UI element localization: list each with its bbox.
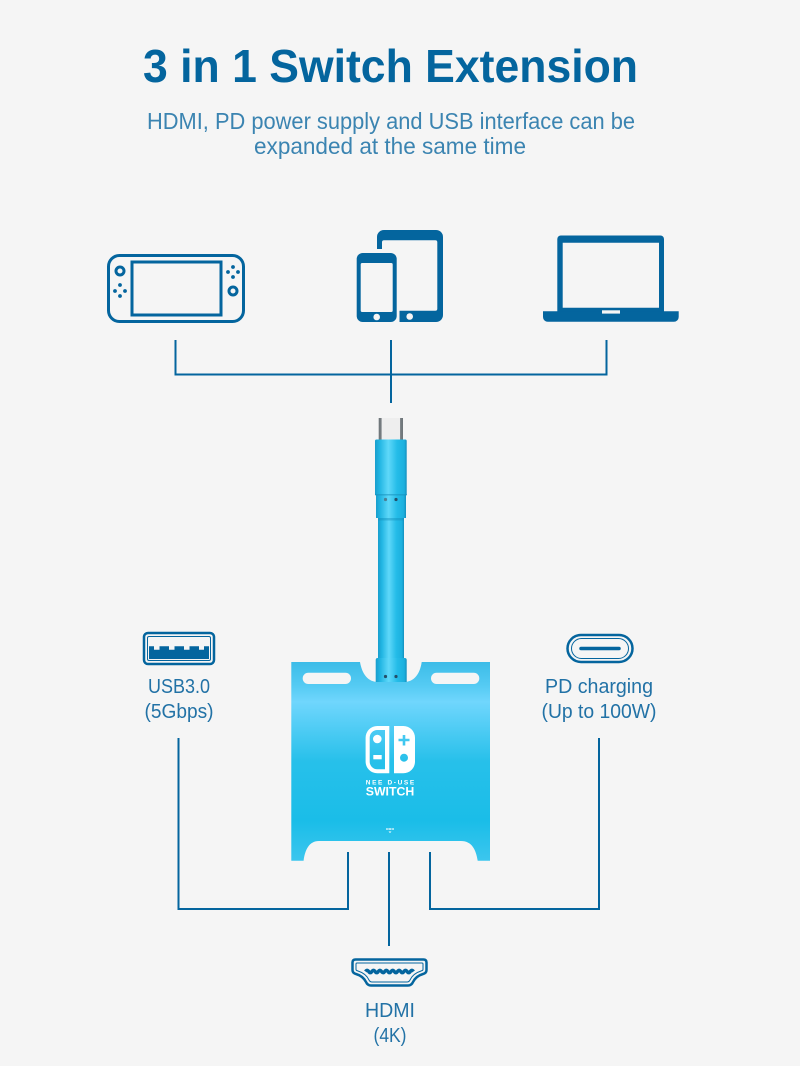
- label: HDMI: (4K): [374, 1025, 406, 1047]
- subtitle: [147, 108, 635, 159]
- subtitle: expanded at the same time: [254, 133, 526, 159]
- label: HDMI: [365, 1000, 415, 1047]
- label: PD charging: [542, 676, 656, 723]
- connector line: USB: [178, 738, 348, 909]
- cable with USB-C plug: [375, 418, 407, 661]
- icon: laptop: [543, 236, 679, 322]
- logo caption: NEE D-USE: [366, 780, 415, 787]
- label: PD charging: (Up to 100W): [542, 701, 656, 723]
- label: HDMI: HDMI: [365, 1000, 415, 1022]
- device plate: [291, 658, 490, 861]
- label: USB3.0: [144, 676, 214, 723]
- connector line: PD: [430, 738, 599, 909]
- icon: HDMI port: [352, 960, 426, 986]
- cable strand: [378, 515, 404, 661]
- Switch logo: [366, 726, 415, 773]
- USB-C metal plug: [379, 418, 403, 440]
- icon: USB-C port: [568, 635, 632, 662]
- title: 3 in 1 Switch Extension: [143, 40, 638, 92]
- label: PD charging: PD charging: [545, 676, 653, 698]
- plug housing: [375, 440, 407, 495]
- logo caption: SWITCH: [366, 784, 414, 798]
- mounting slots: [303, 673, 351, 684]
- cable collar: [376, 658, 407, 682]
- icon: USB port: [144, 633, 214, 664]
- connector line: HDMI: [388, 852, 390, 946]
- connector lines: devices to cable: [176, 340, 606, 403]
- tablet: [377, 230, 443, 322]
- label: USB3.0: USB3.0: [148, 676, 210, 698]
- small mark: [386, 826, 395, 833]
- small mark: ooo: [386, 826, 395, 831]
- strain relief: [376, 495, 406, 518]
- icon: tablet and phone: [357, 230, 443, 325]
- phone: [357, 253, 397, 322]
- plate body: [291, 662, 490, 861]
- icon: game console: [108, 256, 244, 322]
- label: USB3.0: (5Gbps): [144, 701, 214, 723]
- subtitle: HDMI, PD power supply and USB interface can be: [147, 108, 635, 134]
